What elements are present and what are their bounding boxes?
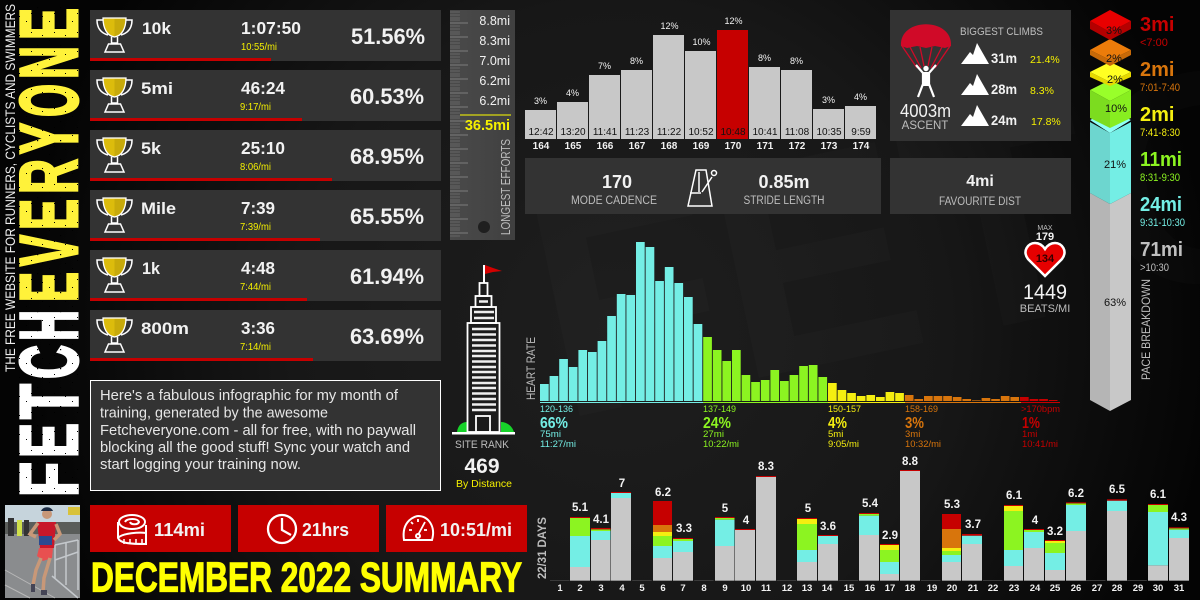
- bar value labels: 4.1: [593, 514, 610, 526]
- day axis labels: 17: [885, 583, 895, 594]
- row: 10k: 10k: [142, 19, 172, 38]
- day axis labels: 5: [639, 583, 645, 594]
- zone: 158-169: 10:32/mi: [905, 439, 941, 450]
- day axis labels: 24: [1030, 583, 1041, 594]
- chart: cadence histogram: 173: [821, 141, 838, 152]
- empty days: [550, 580, 1147, 581]
- zone: 158-169: 3mi: [905, 429, 920, 440]
- lime segment: [1090, 80, 1131, 128]
- bar value labels: 5.1: [572, 502, 589, 514]
- panel: longest efforts ruler: 8.8mi: [479, 14, 510, 28]
- chart: cadence histogram: 170: [725, 141, 742, 152]
- icon: heart: [1026, 243, 1064, 276]
- panel: favourite distance: [890, 158, 1071, 214]
- day axis labels: 30: [1153, 583, 1163, 594]
- chart: heart rate histogram: [524, 242, 1060, 450]
- pace legend: 8:31-9:30: [1140, 172, 1180, 184]
- row: 5k: 5k: [141, 139, 162, 158]
- zone: 158-169: 3%: [905, 415, 924, 432]
- zone: 137-149: 24%: [703, 415, 731, 432]
- red segment: [1090, 10, 1131, 40]
- row: mile: [90, 190, 441, 241]
- vertical logo: E: [4, 423, 95, 458]
- chart: cadence histogram: 8%: [630, 56, 643, 66]
- text block: intro: Fetcheveryone.com - all for free, with no paywall: [100, 423, 416, 439]
- zone: 150-157: 150-157: [828, 404, 861, 415]
- heart rate summary: BEATS/MI: [1020, 303, 1070, 315]
- zone: 150-157: [828, 404, 861, 450]
- row: 800m: 800m: [141, 319, 189, 338]
- zone: 150-157: 4%: [828, 415, 847, 432]
- vertical logo: O: [4, 84, 95, 117]
- chart: cadence histogram: 9:59: [851, 127, 871, 138]
- teal segment: [1090, 110, 1131, 204]
- pace legend: 2mi: [1140, 59, 1174, 81]
- bar value labels: 3.3: [676, 523, 692, 535]
- chart: pace breakdown column: 2%: [1106, 53, 1122, 65]
- bar value labels: 3.2: [1047, 526, 1063, 538]
- day axis labels: 20: [947, 583, 957, 594]
- row: mile: 65.55%: [350, 204, 424, 229]
- zone: over 170: 1%: [1022, 415, 1040, 432]
- chart: pace breakdown column: 10%: [1105, 103, 1127, 115]
- heart rate summary: 1449: [1023, 281, 1067, 304]
- day axis labels: 9: [722, 583, 728, 594]
- chart: cadence histogram: 11:22: [657, 127, 682, 138]
- bar value labels: 6.2: [1068, 488, 1084, 500]
- climb 1: 21.4%: [1030, 54, 1060, 66]
- day axis labels: 29: [1133, 583, 1143, 594]
- chart: cadence histogram: 13:20: [560, 127, 586, 138]
- row: 5mi: 9:17/mi: [240, 102, 271, 113]
- chart: cadence histogram: 8%: [758, 53, 771, 63]
- title: DECEMBER 2022 SUMMARY: [91, 554, 522, 600]
- row: 1k: [90, 250, 441, 301]
- chart: daily distances: 22/31 DAYS: [535, 517, 549, 579]
- chart: cadence histogram: 10:48: [720, 127, 746, 138]
- chart: cadence histogram: 10:52: [688, 127, 714, 138]
- day axis labels: 23: [1009, 583, 1019, 594]
- climb 3: [961, 105, 1061, 128]
- heart rate summary: 134: [1036, 253, 1055, 265]
- day axis labels: 3: [598, 583, 604, 594]
- zone: 120-136: 75mi: [540, 429, 561, 440]
- chart: cadence histogram: 10:41: [752, 127, 778, 138]
- zone: 150-157: 9:05/mi: [828, 439, 859, 450]
- zone: over 170: 10:41/mi: [1022, 439, 1058, 450]
- chart: cadence histogram: 10:35: [816, 127, 842, 138]
- text block: intro: [90, 380, 440, 490]
- panel: ascent and biggest climbs: BIGGEST CLIMBS: [960, 26, 1043, 38]
- chart: heart rate histogram: HEART RATE: [524, 337, 538, 400]
- climb 1: 31m: [991, 50, 1017, 66]
- chart: cadence histogram: 171: [757, 141, 774, 152]
- chart: cadence histogram: 172: [789, 141, 806, 152]
- row: mile: 7:39/mi: [240, 222, 271, 233]
- climb 3: 24m: [991, 112, 1017, 128]
- chart: cadence histogram: 169: [693, 141, 710, 152]
- day axis labels: 16: [865, 583, 875, 594]
- bar value labels: 4: [743, 515, 750, 527]
- heart rate summary: [1020, 225, 1070, 315]
- chart: pace breakdown column: 63%: [1104, 297, 1126, 309]
- grey segment: [1090, 193, 1131, 411]
- yellow segment: [1090, 62, 1131, 86]
- bar value labels: [572, 456, 1187, 542]
- zone: 120-136: 66%: [540, 415, 568, 432]
- panel: cadence and stride: 170: [602, 172, 632, 192]
- day axis labels: 18: [905, 583, 915, 594]
- zone: 137-149: 10:22/mi: [703, 439, 739, 450]
- zone: 120-136: 120-136: [540, 404, 573, 415]
- bar value labels: 3.7: [965, 519, 981, 531]
- zone: 150-157: 5mi: [828, 429, 843, 440]
- icon: tape measure: [118, 515, 146, 544]
- row: 5k: [90, 130, 441, 181]
- day axis labels: 13: [802, 583, 812, 594]
- chart: cadence histogram: 4%: [566, 88, 579, 98]
- row: 5k: 68.95%: [350, 144, 424, 169]
- bar value labels: 5: [805, 503, 812, 515]
- chart: pace breakdown column: 21%: [1104, 159, 1126, 171]
- chart: cadence histogram: 174: [853, 141, 870, 152]
- panel: cadence and stride: 0.85m: [758, 172, 810, 192]
- bar value labels: 8.3: [758, 461, 774, 473]
- row: 800m: 63.69%: [350, 324, 424, 349]
- day axis labels: 31: [1174, 583, 1185, 594]
- panel: longest efforts ruler: LONGEST EFFORTS: [499, 139, 513, 235]
- row: 5mi: 46:24: [241, 78, 285, 98]
- bar value labels: 4.3: [1171, 512, 1187, 524]
- row: 5k: 25:10: [241, 138, 285, 158]
- panel: longest efforts ruler: 7.0mi: [479, 54, 510, 68]
- row: 5mi: 5mi: [141, 79, 173, 98]
- chart: pace breakdown column: 2%: [1107, 74, 1123, 86]
- day axis labels: 21: [968, 583, 979, 594]
- chart: cadence histogram: 4%: [854, 92, 867, 102]
- vertical logo: C: [4, 345, 95, 379]
- zone: over 170: [1021, 404, 1060, 450]
- day axis labels: 22: [988, 583, 998, 594]
- bar value labels: 6.2: [655, 487, 671, 499]
- day axis labels: 12: [782, 583, 792, 594]
- chart: cadence histogram: 10%: [692, 37, 711, 47]
- building icon: site rank: 469: [464, 455, 500, 478]
- icon: skyscraper: [452, 265, 515, 434]
- icon: clock: [268, 515, 296, 543]
- row: 1k: 7:44/mi: [240, 282, 271, 293]
- pace legend: [1139, 14, 1185, 380]
- stat: average pace: [386, 505, 527, 552]
- bar value labels: 8.8: [902, 456, 919, 468]
- day axis labels: 10: [741, 583, 751, 594]
- day axis labels: 19: [927, 583, 937, 594]
- zone: over 170: >170bpm: [1021, 404, 1060, 415]
- panel: longest efforts ruler: 6.2mi: [479, 74, 510, 88]
- pace legend: 3mi: [1140, 14, 1174, 36]
- panel: cadence and stride: [525, 158, 881, 214]
- zone: 120-136: [540, 404, 576, 450]
- text block: intro: start logging your training now.: [100, 457, 301, 473]
- chart: cadence histogram: 12%: [660, 21, 679, 31]
- panel: favourite distance: FAVOURITE DIST: [939, 196, 1021, 208]
- pace legend: 24mi: [1140, 194, 1182, 216]
- icon: metronome: [688, 170, 716, 206]
- pace legend: 11mi: [1140, 149, 1182, 171]
- stat: total distance: 114mi: [154, 520, 205, 540]
- day axis labels: 26: [1071, 583, 1081, 594]
- pace legend: >10:30: [1140, 262, 1169, 274]
- bar value labels: 2.9: [882, 530, 898, 542]
- day axis labels: 25: [1050, 583, 1061, 594]
- panel: cadence and stride: STRIDE LENGTH: [744, 195, 824, 207]
- icon: parachutist: [901, 24, 951, 97]
- bar value labels: 5: [722, 503, 729, 515]
- chart: cadence histogram: 168: [661, 141, 678, 152]
- bar value labels: 4: [1032, 515, 1039, 527]
- pace legend: 71mi: [1140, 239, 1183, 261]
- chart: cadence histogram: 3%: [534, 96, 547, 106]
- row: mile: 7:39: [241, 198, 275, 218]
- row: 5mi: 60.53%: [350, 84, 424, 109]
- bar value labels: 6.1: [1150, 489, 1167, 501]
- day axis labels: 15: [844, 583, 855, 594]
- row: 1k: 4:48: [241, 258, 275, 278]
- building icon: site rank: SITE RANK: [455, 439, 510, 451]
- zone: 137-149: [703, 404, 739, 450]
- vertical logo: T: [4, 384, 95, 419]
- pace legend: 9:31-10:30: [1140, 217, 1185, 229]
- climb 1: [961, 43, 1060, 66]
- text block: intro: training, generated by the awesome: [100, 406, 328, 422]
- zone: 158-169: 158-169: [905, 404, 938, 415]
- panel: longest efforts ruler: [450, 10, 515, 240]
- panel: cadence and stride: MODE CADENCE: [571, 195, 657, 207]
- zone: over 170: 1mi: [1022, 429, 1037, 440]
- climb 2: 28m: [991, 81, 1017, 97]
- vertical logo: Y: [4, 123, 95, 154]
- building icon: site rank: [452, 265, 515, 490]
- pace legend: PACE BREAKDOWN: [1139, 279, 1153, 380]
- pace legend: 2mi: [1140, 104, 1174, 126]
- zone: 137-149: 27mi: [703, 429, 724, 440]
- zone: 158-169: [905, 404, 941, 450]
- pace legend: <7:00: [1140, 37, 1168, 49]
- panel: longest efforts ruler: 36.5mi: [465, 118, 510, 134]
- row: 5k: 8:06/mi: [240, 162, 271, 173]
- panel: ascent and biggest climbs: ASCENT: [902, 120, 948, 132]
- bar value labels: 7: [619, 478, 625, 490]
- chart: cadence histogram: 11:23: [625, 127, 650, 138]
- day axis labels: 1: [557, 583, 563, 594]
- icon: speedometer: [404, 516, 433, 540]
- row: mile: Mile: [141, 199, 176, 218]
- row: 5mi: [90, 70, 441, 121]
- stat: total time: 21hrs: [302, 520, 349, 540]
- zone: 120-136: 11:27/mi: [540, 439, 576, 450]
- vertical logo: E: [4, 199, 95, 230]
- day axis labels: 14: [822, 583, 833, 594]
- stat: average pace: 10:51/mi: [440, 520, 512, 540]
- photo: runner: [5, 505, 80, 598]
- stat: total distance: [90, 505, 231, 552]
- stat: total time: [238, 505, 379, 552]
- row: 10k: 10:55/mi: [241, 42, 277, 53]
- chart: cadence histogram: 3%: [822, 95, 835, 105]
- chart: cadence histogram: 12:42: [528, 127, 554, 138]
- day axis labels: 6: [660, 583, 666, 594]
- row: 10k: 51.56%: [351, 24, 425, 49]
- panel: favourite distance: 4mi: [966, 173, 994, 190]
- heart rate summary: 179: [1036, 231, 1054, 243]
- chart: cadence histogram: 166: [597, 141, 614, 152]
- orange segment: [1090, 39, 1131, 66]
- text block: intro: blocking all the good stuff! Sync your watch and: [100, 440, 410, 456]
- row: 10k: [90, 10, 441, 61]
- panel: personal bests: [90, 10, 441, 361]
- climb 2: 8.3%: [1030, 85, 1054, 97]
- vertical logo: N: [4, 46, 95, 79]
- vertical logo: E: [4, 272, 95, 302]
- chart: cadence histogram: 167: [629, 141, 646, 152]
- row: 1k: 1k: [142, 259, 161, 278]
- row: 800m: [90, 310, 441, 361]
- row: 800m: 7:14/mi: [240, 342, 271, 353]
- stacked bars: [570, 470, 1189, 581]
- chart: cadence histogram: 11:41: [593, 127, 618, 138]
- zone: 137-149: 137-149: [703, 404, 736, 415]
- chart: cadence histogram: [525, 16, 876, 152]
- panel: ascent and biggest climbs: 4003m: [900, 101, 951, 121]
- pace legend: 7:41-8:30: [1140, 127, 1180, 139]
- day axis labels: 7: [680, 583, 686, 594]
- row: 10k: 1:07:50: [241, 18, 301, 38]
- heart rate summary: MAX: [1037, 225, 1053, 232]
- day axis labels: 4: [619, 583, 625, 594]
- bar value labels: 5.4: [862, 498, 879, 510]
- chart: pace breakdown column: [1090, 10, 1131, 411]
- vertical logo: F: [4, 462, 95, 497]
- day axis labels: [557, 583, 1185, 594]
- panel: longest efforts ruler: 6.2mi: [479, 94, 510, 108]
- chart: cadence histogram: 164: [533, 141, 550, 152]
- chart: cadence histogram: 165: [565, 141, 582, 152]
- chart: cadence histogram: 12%: [724, 16, 743, 26]
- chart: cadence histogram: 11:08: [785, 127, 810, 138]
- bar value labels: 6.5: [1109, 484, 1126, 496]
- day axis labels: 8: [701, 583, 707, 594]
- text block: intro: Here's a fabulous infographic for my month of: [100, 388, 399, 404]
- vertical logo: V: [4, 235, 95, 266]
- day axis labels: 28: [1112, 583, 1122, 594]
- day axis labels: 2: [577, 583, 583, 594]
- chart: pace breakdown column: 3%: [1106, 25, 1122, 37]
- bar value labels: 3.6: [820, 521, 836, 533]
- building icon: site rank: By Distance: [456, 478, 512, 490]
- pace legend: 7:01-7:40: [1140, 82, 1180, 94]
- vertical logo: H: [4, 310, 95, 341]
- chart: daily distances: [535, 456, 1189, 594]
- panel: ascent and biggest climbs: [890, 10, 1071, 141]
- day axis labels: 11: [761, 583, 772, 594]
- chart: cadence histogram: 8%: [790, 56, 803, 66]
- climb 3: 17.8%: [1031, 116, 1061, 128]
- panel: longest efforts ruler: 8.3mi: [479, 34, 510, 48]
- chart: cadence histogram: 7%: [598, 61, 611, 71]
- day axis labels: 27: [1092, 583, 1102, 594]
- vertical logo: R: [4, 159, 95, 194]
- vertical logo: [4, 5, 95, 500]
- bar value labels: 6.1: [1006, 490, 1023, 502]
- row: 800m: 3:36: [241, 318, 275, 338]
- row: 1k: 61.94%: [350, 264, 424, 289]
- climb 2: [961, 74, 1054, 97]
- bar value labels: 5.3: [944, 499, 960, 511]
